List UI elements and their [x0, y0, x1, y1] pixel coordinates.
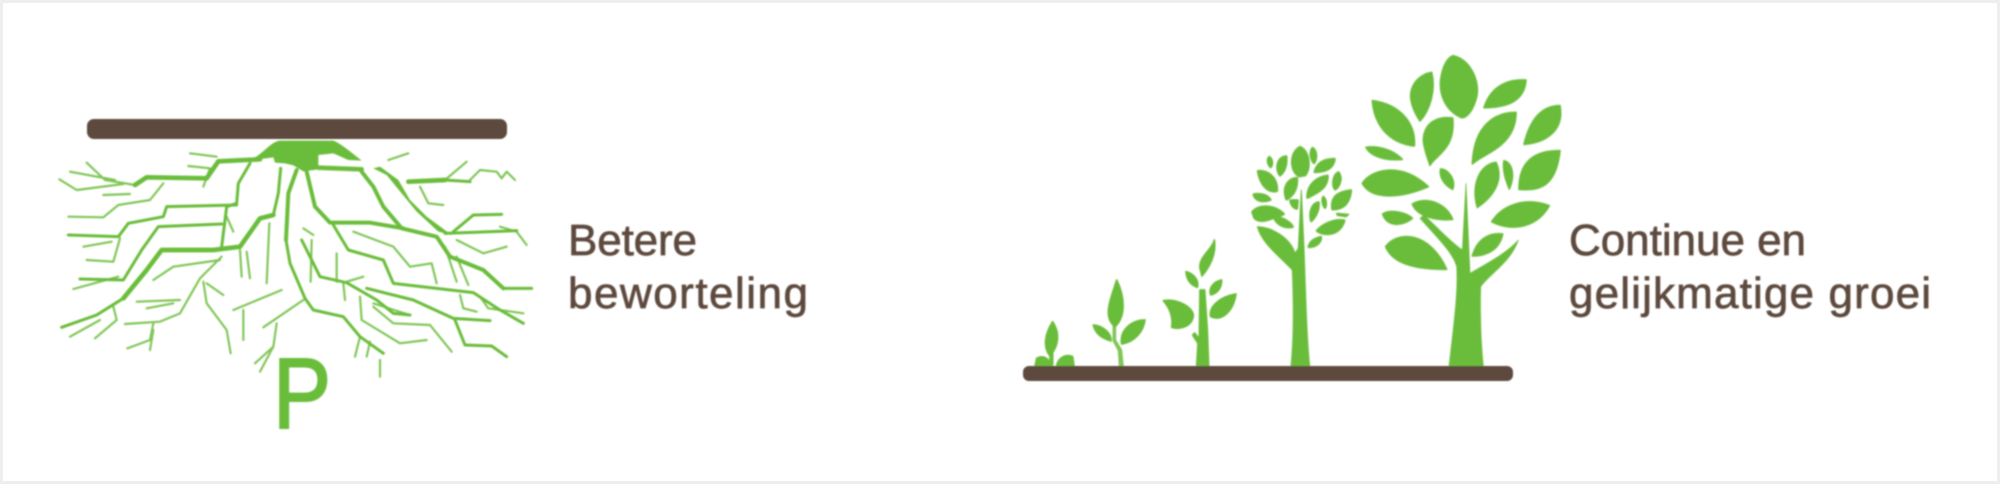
icon: medium and large trees [1253, 56, 1561, 366]
icon: young plant [1163, 240, 1236, 367]
letter P: P [273, 337, 331, 449]
icon: seedling [1035, 322, 1074, 366]
icon: root system [59, 141, 532, 377]
icon: soil bar under plants [1023, 366, 1513, 381]
icon: medium tree [1253, 147, 1351, 366]
text: continue groei [1569, 216, 1931, 318]
icon: large tree [1362, 56, 1561, 366]
text: betere beworteling [568, 216, 808, 318]
panel: betere beworteling [59, 119, 532, 449]
icon: soil bar above roots [87, 119, 507, 139]
panel: continue groei [1023, 56, 1561, 381]
text: betere beworteling: Betere [568, 216, 697, 265]
text: continue groei: Continue en [1569, 216, 1806, 265]
text: continue groei: gelijkmatige groei [1569, 269, 1931, 318]
icon: small plants [1035, 240, 1236, 367]
icon: sprout [1093, 280, 1145, 367]
text: betere beworteling: beworteling [568, 269, 808, 318]
